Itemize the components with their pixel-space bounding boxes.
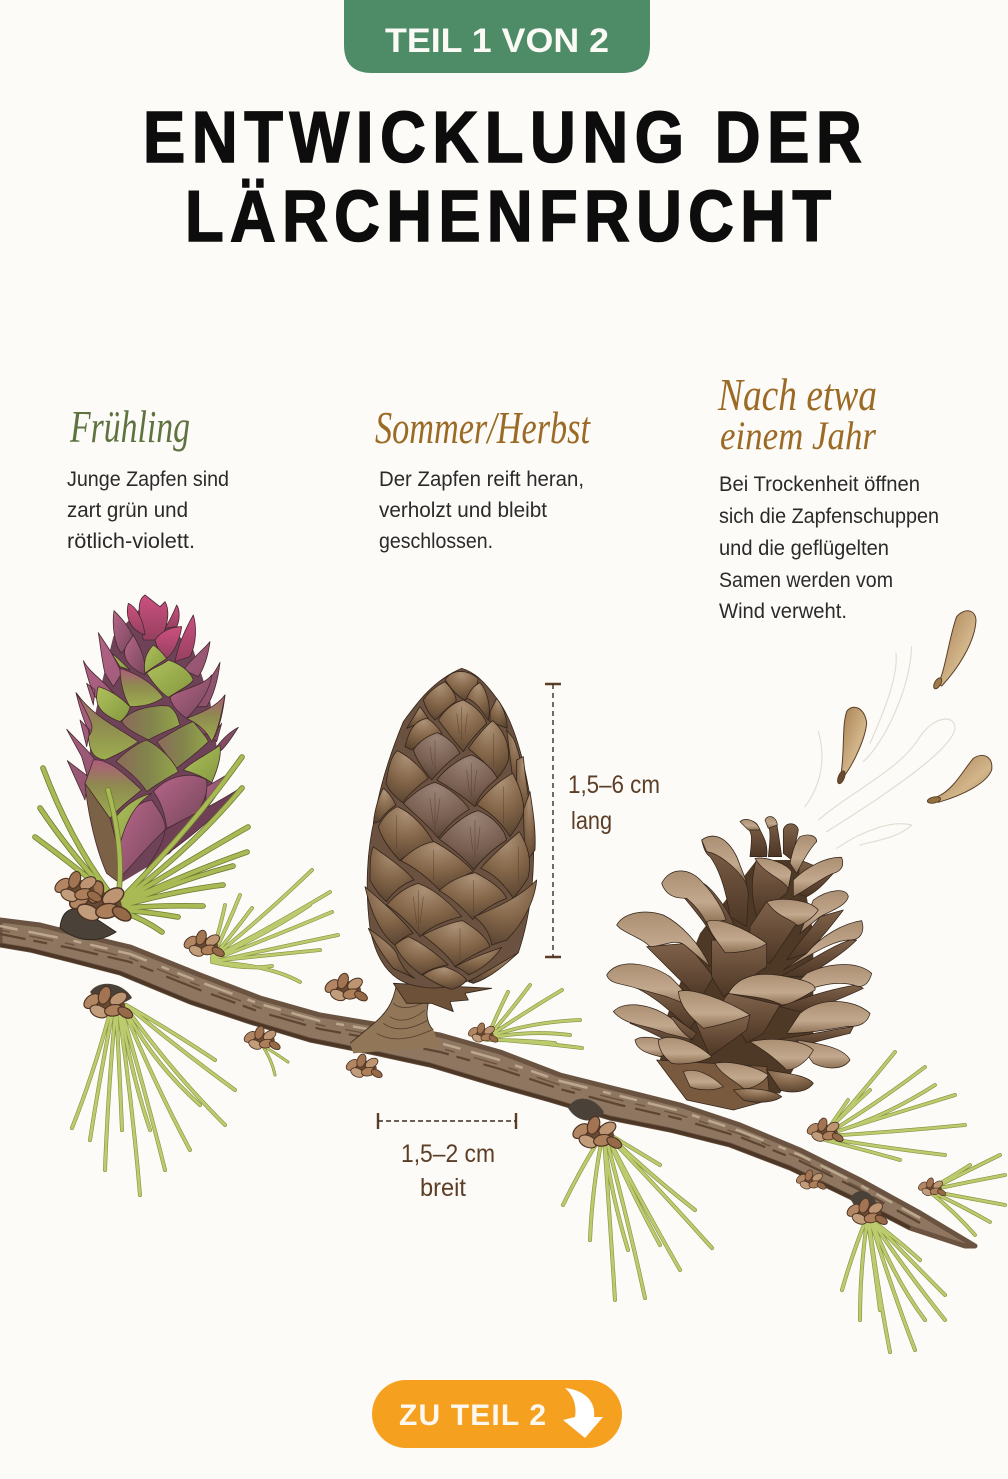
seed: top right xyxy=(932,611,976,690)
middle spread scales xyxy=(617,912,710,967)
description: summer and autumn xyxy=(379,468,584,553)
description: after a year: sich die Zapfenschuppen xyxy=(719,505,939,528)
scale streaks xyxy=(397,707,518,960)
text block: Nach etwa einem Jahr xyxy=(717,369,939,623)
seed: middle xyxy=(836,707,867,785)
part banner: Teil 1 von 2: TEIL 1 VON 2 xyxy=(385,22,609,60)
label: 1,5–6 cm lang: 1,5–6 cm xyxy=(568,771,660,799)
heading: Nach etwa einem Jahr xyxy=(717,369,877,458)
description: after a year: Bei Trockenheit öffnen xyxy=(719,473,920,496)
description: after a year: und die geflügelten xyxy=(719,537,889,560)
text block: Sommer/Herbst xyxy=(375,402,591,553)
seed: right xyxy=(927,755,992,804)
needle tuft: centre xyxy=(488,985,582,1048)
needle tuft: branch tip xyxy=(930,1155,1005,1235)
part banner: Teil 1 von 2 xyxy=(344,0,650,73)
text block: Frühling xyxy=(67,401,229,553)
description: after a year xyxy=(719,473,939,623)
needle tuft: hanging right xyxy=(842,1222,945,1352)
branch knot under buds xyxy=(60,909,116,940)
title: ENTWICKLUNG DER xyxy=(143,98,868,178)
description: summer and autumn: Der Zapfen reift heran, xyxy=(379,468,584,491)
measure: cone width xyxy=(378,1113,516,1202)
top cluster of scales xyxy=(740,816,817,873)
needles at cone base xyxy=(35,757,248,932)
title xyxy=(143,98,868,257)
description: spring: Junge Zapfen sind xyxy=(67,468,229,491)
description: spring: zart grün und xyxy=(67,499,188,522)
vertical dashed scale xyxy=(545,684,561,957)
title: LÄRCHENFRUCHT xyxy=(185,177,837,257)
spring cone needles and bud cluster xyxy=(35,757,248,940)
open cone with spread scales xyxy=(607,816,872,1110)
needle tuft: right top xyxy=(825,1052,965,1160)
bud scales xyxy=(52,870,133,924)
icon: curved down arrow xyxy=(563,1388,603,1438)
heading: Nach etwa einem Jahr: einem Jahr xyxy=(720,413,876,458)
description: spring xyxy=(67,468,229,553)
heading: Nach etwa einem Jahr: Nach etwa xyxy=(717,369,877,420)
description: summer and autumn: verholzt und bleibt xyxy=(379,499,547,522)
cone stem xyxy=(350,983,492,1053)
buds and knots along the branch xyxy=(81,929,947,1226)
description: spring: rötlich-violett. xyxy=(67,530,195,553)
description: after a year: Wind verweht. xyxy=(719,600,847,623)
wind lines xyxy=(805,647,955,848)
needle tuft: hanging left xyxy=(72,1005,235,1195)
button: Zu Teil 2: ZU TEIL 2 xyxy=(399,1399,546,1432)
horizontal dashed scale xyxy=(378,1113,516,1129)
spring cone: pink and green xyxy=(67,595,240,883)
heading: Sommer/Herbst: Sommer/Herbst xyxy=(375,402,591,453)
description: summer and autumn: geschlossen. xyxy=(379,530,493,553)
larch branch with bark texture xyxy=(0,920,975,1246)
needle tuft: small xyxy=(262,1045,288,1075)
lower spread scales xyxy=(613,1005,693,1040)
needle tuft: hanging centre xyxy=(563,1136,712,1300)
label: 1,5–2 cm breit: 1,5–2 cm xyxy=(401,1140,495,1168)
button: Zu Teil 2 xyxy=(372,1380,622,1448)
leaf tufts xyxy=(72,870,1005,1352)
measure: cone length: lang xyxy=(571,807,612,835)
needle tuft: left of branch top xyxy=(212,870,338,982)
measure: cone width: breit xyxy=(420,1174,466,1202)
woody core and base xyxy=(630,860,863,1110)
upper spread scales xyxy=(793,857,843,897)
summer cone: closed brown cone xyxy=(350,668,537,1053)
heading: Frühling: Frühling xyxy=(69,401,190,452)
measure: cone length xyxy=(545,684,660,957)
winged seeds xyxy=(836,611,992,804)
description: after a year: Samen werden vom xyxy=(719,569,893,592)
